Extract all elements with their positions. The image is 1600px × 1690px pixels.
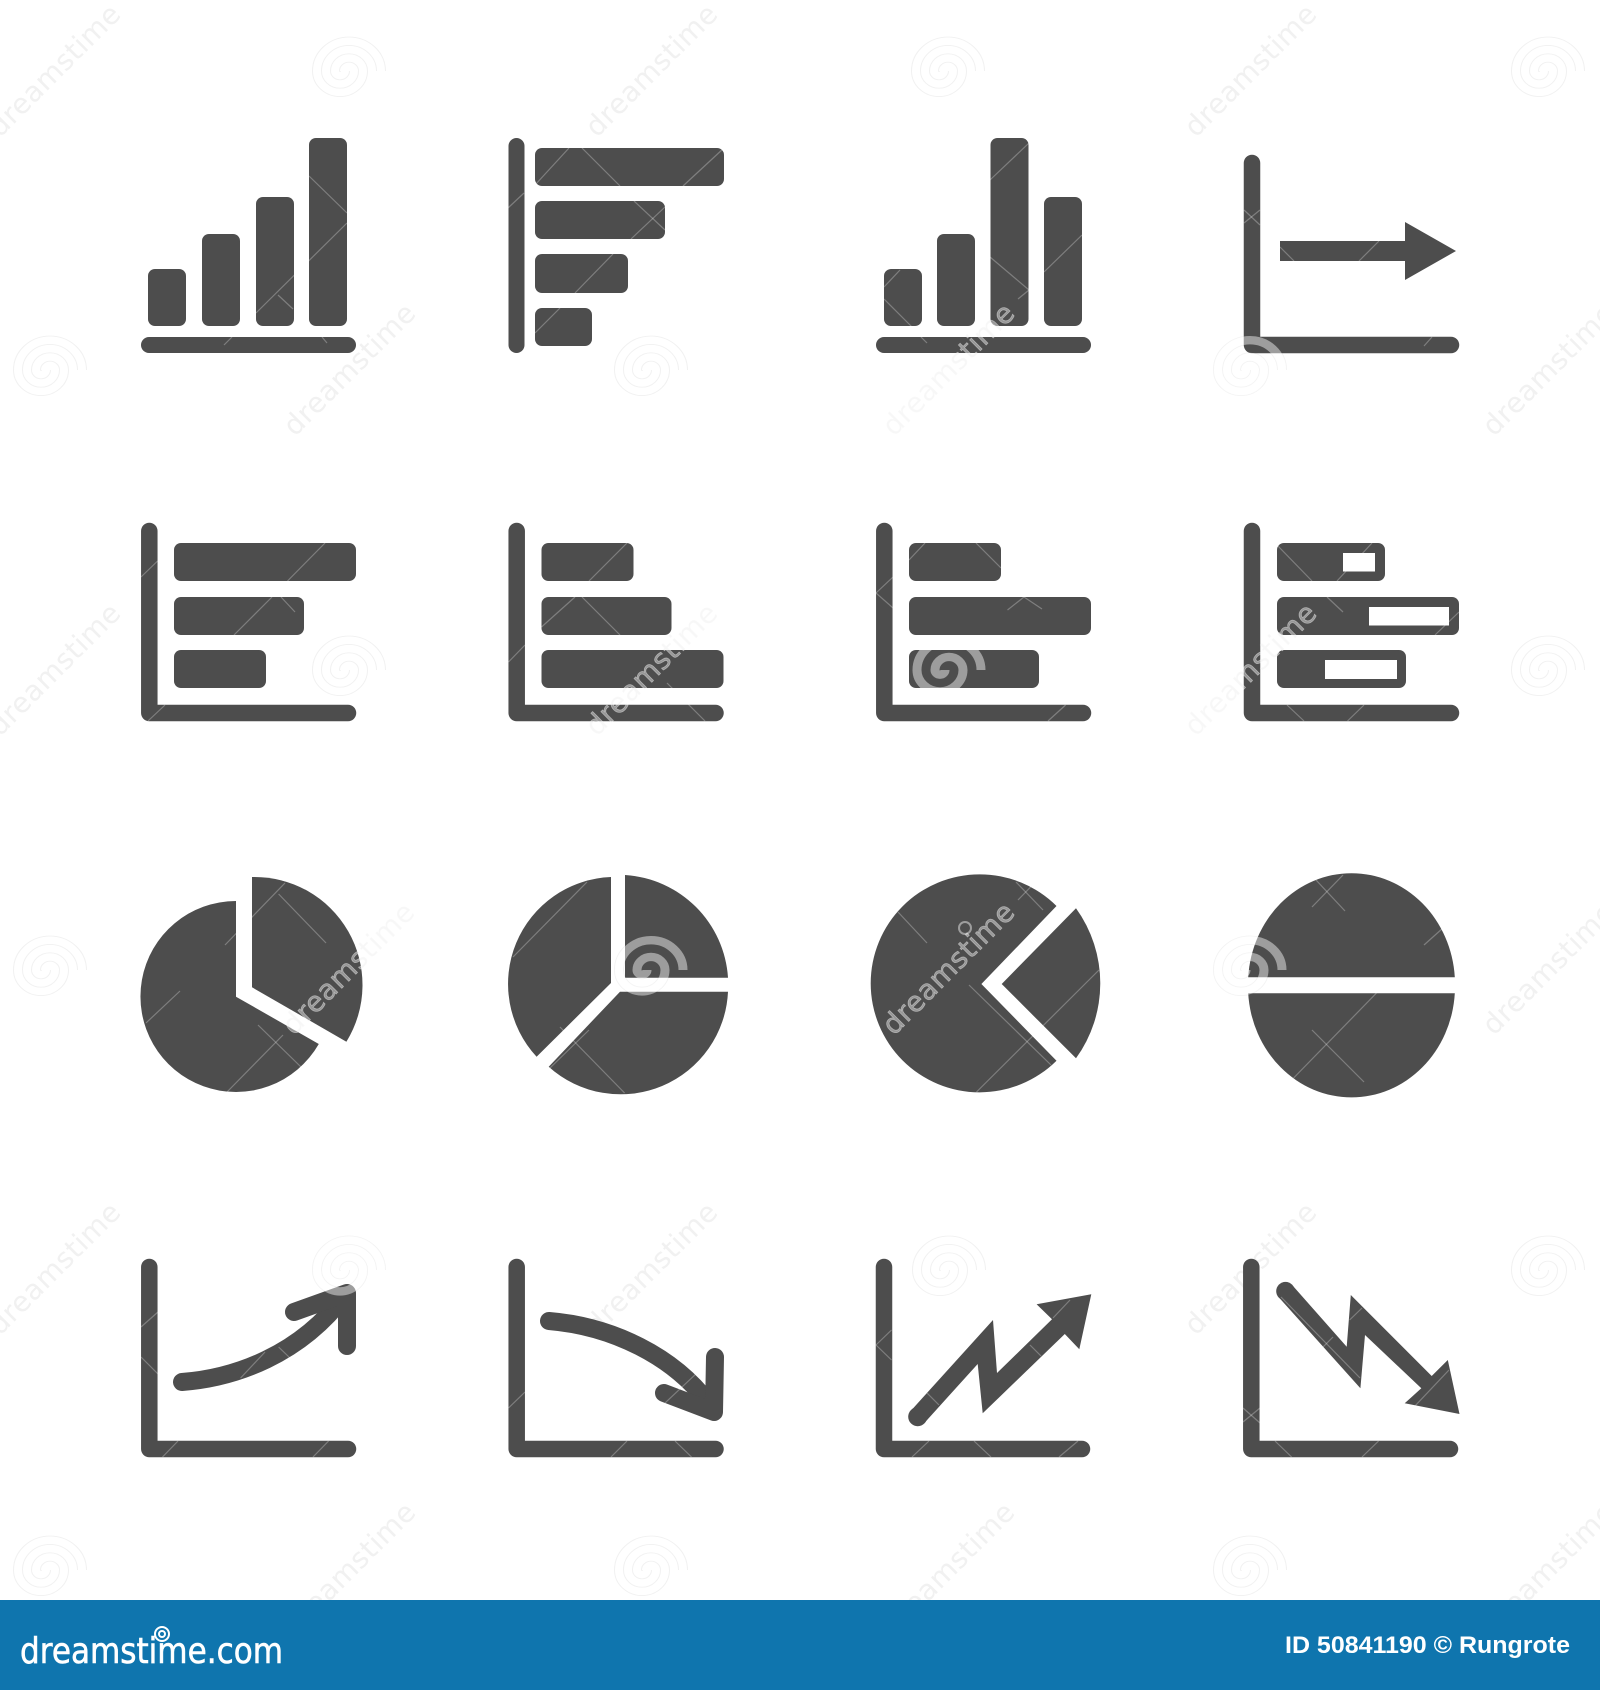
icon: horizontal bars ascending — [517, 531, 724, 713]
watermark layer on white: dreamstime — [876, 1496, 1021, 1641]
watermark layer on white: dreamstime — [876, 297, 1021, 442]
watermark layer over icons: dreamstime — [876, 896, 1021, 1041]
footer image id and credit: ID 50841190 © Rungrote — [1285, 1632, 1570, 1659]
icon: pie chart with exploded slice — [140, 877, 362, 1092]
watermark layer over icons: dreamstime — [579, 597, 724, 742]
footer banner — [0, 1600, 1600, 1690]
footer logo text: dreamstime.com — [20, 1631, 283, 1672]
icon: rising bar chart — [141, 138, 356, 353]
watermark layer on white: dreamstime — [277, 1496, 422, 1641]
watermark layer on white: dreamstime — [277, 297, 422, 442]
icon: progress bars with white insets — [1252, 531, 1459, 713]
watermark layer over icons: dreamstime — [876, 297, 1021, 442]
icon: falling zigzag arrow — [1251, 1267, 1460, 1449]
icon: pie chart with wedge cut out — [871, 874, 1100, 1092]
watermark layer on white: dreamstime — [579, 597, 724, 742]
watermark layer on white: dreamstime — [1178, 1196, 1323, 1341]
icon: rising curve arrow — [149, 1267, 348, 1449]
watermark layer on white: dreamstime — [1178, 0, 1323, 143]
icon: pie chart with three slices — [508, 875, 728, 1094]
icon: falling curve arrow — [517, 1267, 716, 1449]
icon: axes with right arrow — [1252, 163, 1456, 345]
icon: rising zigzag arrow — [884, 1267, 1091, 1449]
watermark layer on white: dreamstime — [276, 896, 421, 1041]
watermark layer on white: dreamstime — [579, 1196, 724, 1341]
icon: descending horizontal bars on vertical axis — [508, 138, 724, 353]
watermark layer on white: dreamstime — [579, 0, 724, 143]
watermark layer over icons: dreamstime — [276, 896, 421, 1041]
watermark layer on white: dreamstime — [1178, 597, 1323, 742]
icon: mixed vertical bar chart — [876, 138, 1091, 353]
icon: horizontal bars mixed — [884, 531, 1091, 713]
icon: pie chart split in half — [1248, 873, 1455, 1097]
watermark layer over icons: dreamstime — [1178, 597, 1323, 742]
watermark layer over icons — [276, 297, 1323, 1291]
footer logo spiral — [155, 1627, 169, 1641]
icon: horizontal bars descending — [149, 531, 356, 713]
